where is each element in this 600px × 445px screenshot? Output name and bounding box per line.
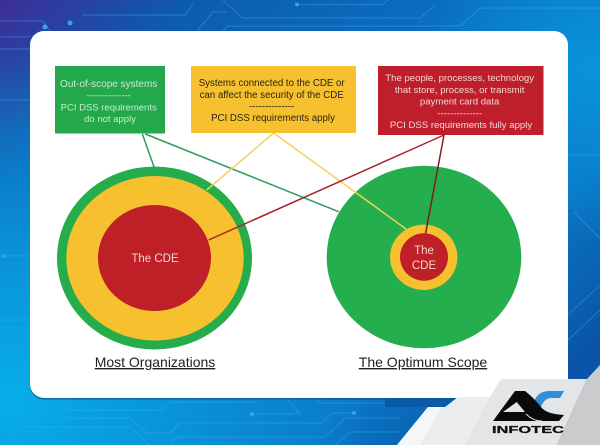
- callout: cardholder data environment: that store, process, or transmit: [395, 85, 525, 96]
- callout: out of scope: [55, 66, 165, 134]
- callout: cardholder data environment: The people, processes, technology: [385, 73, 534, 84]
- callout: connected systems: PCI DSS requirements apply: [211, 113, 335, 124]
- callout: connected systems: --------------: [249, 102, 294, 112]
- callout: cardholder data environment: payment card data: [420, 96, 500, 108]
- label: the CDE right: The: [414, 245, 434, 257]
- label: the CDE left: The CDE: [131, 253, 179, 265]
- callout: connected systems: Systems connected to the CDE or: [199, 78, 345, 89]
- heading: the optimum scope: The Optimum Scope: [359, 354, 487, 370]
- diagram: most organizations: [57, 166, 252, 350]
- callout: out of scope: do not apply: [84, 114, 136, 125]
- white card: [30, 31, 568, 398]
- label: the CDE right: CDE: [412, 260, 436, 272]
- corner logo panel: [385, 365, 600, 445]
- logo: AC infotec: [492, 391, 565, 436]
- connector lines: [142, 133, 444, 240]
- callout: out of scope: PCI DSS requirements: [61, 102, 157, 114]
- diagram: optimum scope: [327, 166, 521, 348]
- heading: most organizations: Most Organizations: [95, 354, 215, 370]
- callout: cardholder data environment: [378, 66, 544, 135]
- callout: connected systems: can affect the security of the CDE: [200, 90, 344, 101]
- callout: connected systems: [191, 66, 356, 133]
- logo wordmark: INFOTEC: [492, 424, 565, 436]
- callout: out of scope: Out-of-scope systems: [60, 79, 157, 90]
- callout: out of scope: --------------: [87, 90, 131, 102]
- card shadow: [30, 32, 568, 400]
- callout: cardholder data environment: --------------: [437, 108, 482, 120]
- callout: cardholder data environment: PCI DSS requirements fully apply: [390, 120, 532, 131]
